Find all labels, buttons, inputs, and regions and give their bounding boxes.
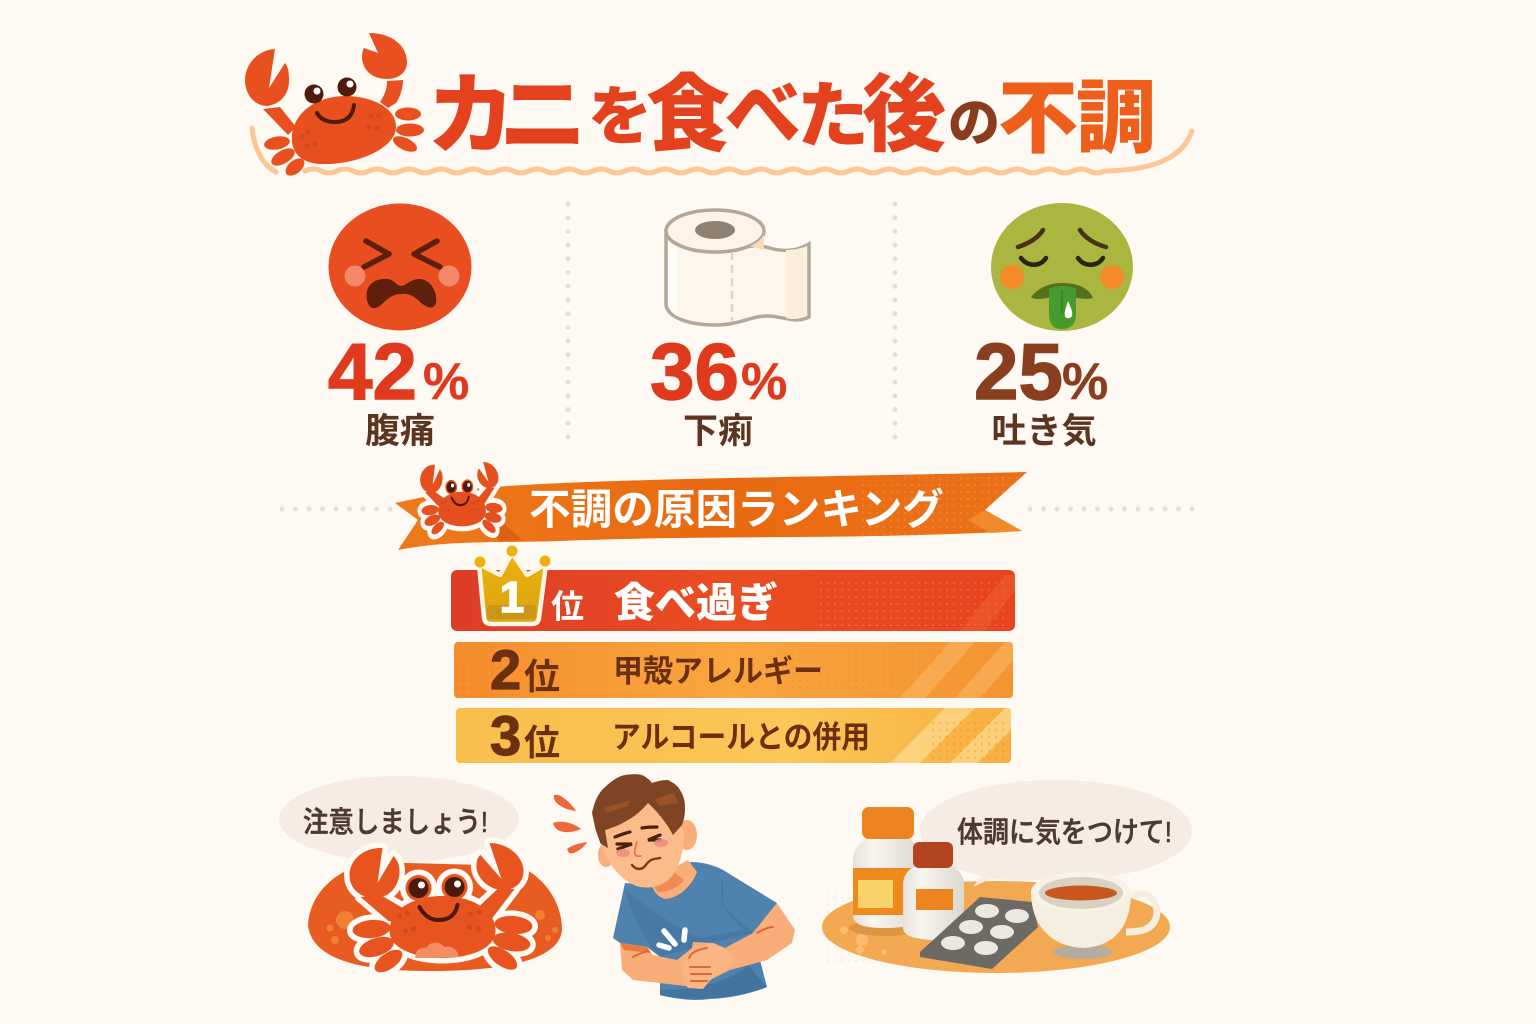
horizontal dotted lines	[282, 506, 1194, 512]
speech bubble: take care	[920, 780, 1192, 887]
icon: gold crown	[474, 546, 550, 624]
number: 25%: 25	[974, 327, 1063, 416]
rank 1 row	[451, 546, 1015, 631]
face	[600, 798, 684, 888]
illustration: medicine and tea	[822, 780, 1192, 973]
panel: abdominal pain stat	[328, 204, 472, 451]
large bottle	[849, 807, 921, 936]
rank label: 3	[490, 704, 521, 767]
blister pack	[920, 897, 1038, 969]
icon: nauseous face	[991, 203, 1133, 331]
title: 調	[1076, 74, 1156, 163]
number: 25%: %	[1062, 353, 1108, 411]
illustration: crab on textured blob	[308, 843, 562, 977]
banner heading: 不調の原因ランキング	[529, 486, 944, 533]
illustration: man with stomach ache	[553, 774, 795, 1000]
icon: toilet roll	[666, 210, 809, 325]
speech bubble: caution	[279, 776, 519, 862]
title: 後	[862, 68, 946, 162]
rank 3 row	[456, 704, 1011, 767]
shirt	[613, 862, 777, 1000]
title	[427, 66, 1156, 165]
small bottle	[903, 842, 964, 940]
title: の	[948, 95, 1000, 153]
icon: gold crown: 1	[500, 573, 524, 622]
rank label: 位	[524, 722, 560, 763]
title: カニ	[427, 66, 587, 165]
rank label: 位	[551, 588, 584, 625]
tea cup	[1031, 872, 1157, 959]
title: 不	[998, 74, 1078, 163]
rank 2 row	[454, 638, 1013, 701]
number: 36%: %	[741, 353, 787, 411]
panel: diarrhea stat	[650, 210, 809, 451]
panel: nausea stat	[974, 203, 1133, 451]
rank label: 2	[490, 638, 521, 701]
icon: title crab	[245, 33, 424, 179]
hair	[592, 774, 685, 848]
title underline wave	[252, 128, 1192, 173]
cause text: 食べ過ぎ	[614, 580, 778, 626]
rank label: 位	[524, 656, 560, 697]
neck	[650, 860, 697, 899]
arms and hands	[620, 903, 795, 988]
title: べ	[725, 72, 801, 157]
icon: banner crab	[420, 462, 503, 537]
number: 42%: %	[423, 353, 469, 411]
orange tray	[822, 881, 1170, 973]
speech bubble: caution: 注意しましょう!	[303, 806, 488, 839]
cause text: 甲殻アレルギー	[613, 654, 823, 689]
number: 42%: 42	[328, 327, 417, 416]
cause text: アルコールとの併用	[612, 720, 870, 755]
ears	[677, 820, 697, 850]
eyes, cheeks, mouth	[615, 827, 660, 849]
impact marks	[659, 930, 685, 948]
title: 食	[646, 68, 730, 162]
title: た	[797, 77, 869, 157]
vertical dotted dividers	[568, 204, 895, 440]
label: 下痢: 下痢	[683, 412, 753, 451]
speech bubble: take care: 体調に気をつけて!	[957, 816, 1172, 849]
label: 腹痛: 腹痛	[365, 412, 435, 451]
ranking banner	[395, 462, 1027, 550]
pain marks	[553, 795, 587, 853]
icon: pained face	[328, 204, 472, 330]
number: 36%: 36	[650, 327, 739, 416]
title: を	[588, 81, 652, 153]
label: 吐き気: 吐き気	[991, 412, 1097, 451]
